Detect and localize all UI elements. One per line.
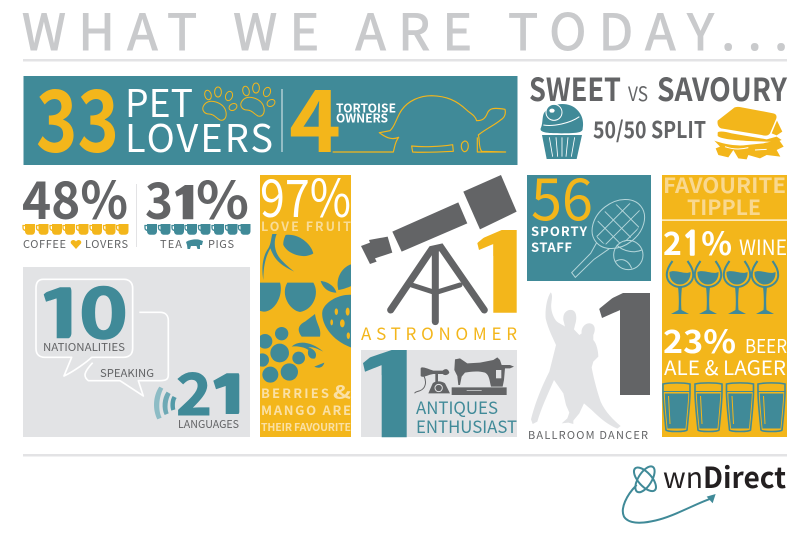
label: astronomer: ASTRONOMER — [361, 320, 517, 345]
logo: ownDirect — [623, 455, 786, 523]
label: antiques enthusiast: ANTIQUES — [416, 394, 498, 419]
icon: globe with arrow — [623, 463, 716, 523]
number: 31% — [146, 180, 248, 220]
label: coffee love lovers: LOVERS — [85, 236, 128, 252]
number: 10 nationalities: 1 — [40, 286, 79, 343]
stat: tea pigs — [144, 180, 250, 249]
number: 1 ballroom: 1 — [592, 291, 671, 405]
number: 31%: 1 — [174, 185, 200, 223]
label: sporty staff — [531, 221, 587, 256]
icon: telephone and sewing machine — [415, 357, 514, 395]
number: 10 nationalities: 0 — [79, 258, 128, 359]
label: antiques enthusiast — [416, 394, 517, 438]
icon row: coffee cups — [23, 224, 128, 235]
heading: sweet vs savoury: VS — [628, 78, 648, 107]
figure: ballroom dancers — [529, 292, 650, 439]
label: pet lovers: LOVERS — [125, 108, 273, 163]
wordmark: wn — [663, 455, 703, 497]
icon: cupcake — [541, 104, 583, 159]
stat: 23% beer: ALE & LAGER — [664, 352, 786, 381]
number: 4 tortoise owners: 4 — [289, 52, 341, 177]
label: speaking: SPEAKING — [100, 365, 154, 381]
heading: favourite tipple: FAVOURITE — [663, 170, 786, 200]
label: tortoise owners — [336, 100, 396, 126]
number: 1 antiques: 1 — [357, 348, 424, 445]
icon: paw prints — [203, 83, 276, 120]
stat: coffee lovers: 48% — [22, 159, 128, 234]
icon: tortoise outline — [333, 96, 506, 152]
label: love fruit: LOVE FRUIT — [261, 216, 351, 235]
stat: 23% beer: 23% — [663, 317, 736, 363]
number: 97%: 97% — [260, 157, 351, 232]
heading: favourite tipple: TIPPLE — [687, 192, 761, 222]
number: 31%: % — [196, 159, 249, 234]
label: tortoise owners: OWNERS — [336, 110, 388, 126]
icon row: tea cups — [145, 224, 250, 235]
text: 50/50 split: 50/50 SPLIT — [593, 111, 706, 145]
stat: 21% wine: 21% — [663, 219, 732, 265]
panel: love fruit — [260, 175, 351, 437]
icon row: wine glasses — [667, 261, 778, 314]
label: pet lovers: PET — [125, 73, 193, 128]
icon row: pint glasses — [663, 383, 785, 432]
icon: sound waves — [154, 387, 177, 419]
label: tea pigs: PIGS — [208, 236, 234, 252]
panel: sporty staff — [527, 175, 651, 281]
stat: 23% beer — [663, 317, 787, 381]
label: tea pigs — [160, 236, 234, 252]
text: berries and mango are their favourite — [261, 378, 351, 435]
label: tortoise owners: TORTOISE — [336, 100, 396, 116]
panel: pet lovers and tortoise owners — [24, 52, 518, 177]
heading: favourite tipple — [663, 170, 786, 222]
wordmark: Direct — [703, 455, 786, 497]
panel: antiques enthusiast — [361, 350, 517, 438]
icon: fruit illustrations — [256, 234, 353, 383]
icon: tennis racket and ball — [571, 199, 646, 278]
panel: astronomer — [361, 175, 517, 340]
label: sporty staff: STAFF — [531, 237, 572, 256]
panel: nationalities and languages — [23, 258, 250, 437]
text: berries and mango are their favourite: & — [333, 378, 351, 405]
stat: 23% beer: BEER — [745, 332, 787, 359]
number: 31%: 3 — [145, 162, 173, 234]
number: 21 languages: 2 — [176, 348, 212, 432]
icon: sandwich — [714, 107, 784, 159]
number: 10 nationalities — [44, 286, 126, 340]
stat: 21% wine — [663, 219, 787, 265]
icon: dancing couple silhouette — [531, 292, 621, 429]
heading: sweet vs savoury: SWEET — [529, 65, 621, 111]
text: berries and mango are their favourite: THEIR FAVOURITE — [261, 420, 351, 435]
label: languages: LANGUAGES — [178, 416, 239, 432]
label: pet lovers — [125, 73, 273, 163]
number: 21 languages: 1 — [210, 373, 247, 419]
heading: sweet vs savoury: SAVOURY — [657, 65, 787, 111]
label: nationalities: NATIONALITIES — [43, 339, 125, 355]
text: berries and mango are their favourite: BERRIES — [261, 383, 329, 402]
number: 21 languages — [178, 372, 240, 416]
wordmark — [663, 455, 786, 497]
icon: telescope — [361, 175, 517, 322]
stat: 21% wine: WINE — [739, 232, 787, 262]
number: 56: 56 — [531, 153, 593, 237]
label: sporty staff: SPORTY — [531, 221, 587, 240]
label: antiques enthusiast: ENTHUSIAST — [416, 413, 517, 438]
text: berries and mango are their favourite: MANGO ARE — [261, 400, 351, 419]
speech bubbles — [36, 279, 168, 396]
label: coffee love lovers — [23, 236, 128, 252]
number: 1 astronomer: 1 — [472, 228, 536, 321]
panel: sweet vs savoury — [529, 65, 787, 159]
heading: sweet vs savoury — [529, 65, 787, 111]
number: 33 pet lovers: 33 — [36, 52, 119, 177]
label: coffee love lovers: COFFEE — [23, 236, 66, 252]
panel: favourite tipple — [662, 170, 787, 437]
label: tea pigs: TEA — [160, 236, 182, 252]
label: ballroom dancer: BALLROOM DANCER — [528, 427, 648, 443]
